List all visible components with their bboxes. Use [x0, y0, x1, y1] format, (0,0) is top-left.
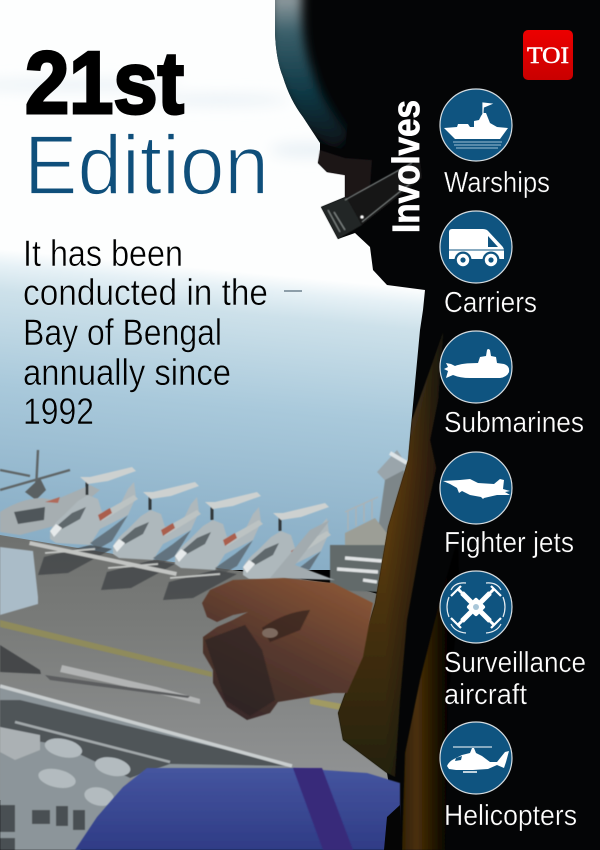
trousers	[75, 768, 400, 850]
person silhouette: helmet, head, window frame and torso in shadow	[275, 0, 600, 850]
deck runway markings	[0, 620, 342, 710]
label: Warships: Warships	[444, 167, 550, 199]
description text: annually since	[23, 352, 231, 393]
goggle strap	[346, 160, 422, 225]
label: Carriers: Carriers	[444, 287, 537, 319]
shirt shading	[338, 333, 443, 777]
item: submarines	[440, 331, 584, 439]
TOI logo	[523, 30, 573, 80]
goggles	[321, 163, 412, 239]
distant ship on horizon	[284, 290, 302, 292]
thin clouds in sky	[0, 80, 350, 157]
second sleeve fold	[402, 537, 460, 850]
item: warships	[440, 89, 550, 199]
flight deck	[0, 535, 400, 800]
sea	[0, 245, 440, 570]
parked helicopters	[0, 450, 335, 611]
hand	[202, 578, 373, 720]
title line: Edition: Edition	[24, 118, 269, 212]
title line: 21st: 21st	[25, 33, 184, 132]
title	[24, 33, 269, 212]
icon: drone	[440, 571, 512, 643]
item: fighter jets	[440, 452, 574, 559]
icon: warship	[440, 89, 512, 161]
velcro strap	[293, 768, 353, 850]
item: helicopters	[440, 722, 577, 832]
shirt sleeve lit along the window	[338, 333, 443, 777]
TOI logo: TOI	[527, 43, 569, 68]
vertical heading: Involves: Involves	[386, 100, 428, 233]
icon: submarine	[440, 331, 512, 403]
label: Submarines: Submarines	[444, 407, 584, 439]
ship side with railings and lifeboats	[0, 686, 295, 850]
face	[318, 150, 372, 198]
label: Surveillance aircraft: Surveillance	[444, 647, 586, 679]
icon: fighter jet	[440, 452, 512, 524]
dark seat edge	[384, 805, 402, 850]
icon: helicopter	[440, 722, 512, 794]
helmet reflection	[275, 0, 347, 147]
sky	[0, 0, 440, 300]
item: surveillance aircraft	[440, 571, 586, 711]
tail section in left foreground	[0, 547, 38, 615]
ship island structure on right	[330, 450, 407, 592]
thumb shadow	[262, 610, 310, 642]
photo background: view from aircraft over flight deck	[0, 0, 447, 850]
label: Surveillance aircraft	[444, 647, 586, 711]
description text: Bay of Bengal	[23, 312, 222, 353]
description text	[23, 233, 268, 432]
label: Helicopters: Helicopters	[444, 800, 577, 832]
thumbnail highlight	[262, 628, 278, 638]
description text: 1992	[23, 391, 94, 432]
description text: It has been	[23, 233, 183, 274]
item: carriers	[440, 211, 537, 319]
thumb and lower finger shadow	[205, 625, 275, 716]
description text: conducted in the	[23, 272, 268, 313]
icon: van	[440, 211, 512, 283]
label: Fighter jets: Fighter jets	[444, 527, 574, 559]
label: Surveillance aircraft: aircraft	[444, 679, 527, 711]
